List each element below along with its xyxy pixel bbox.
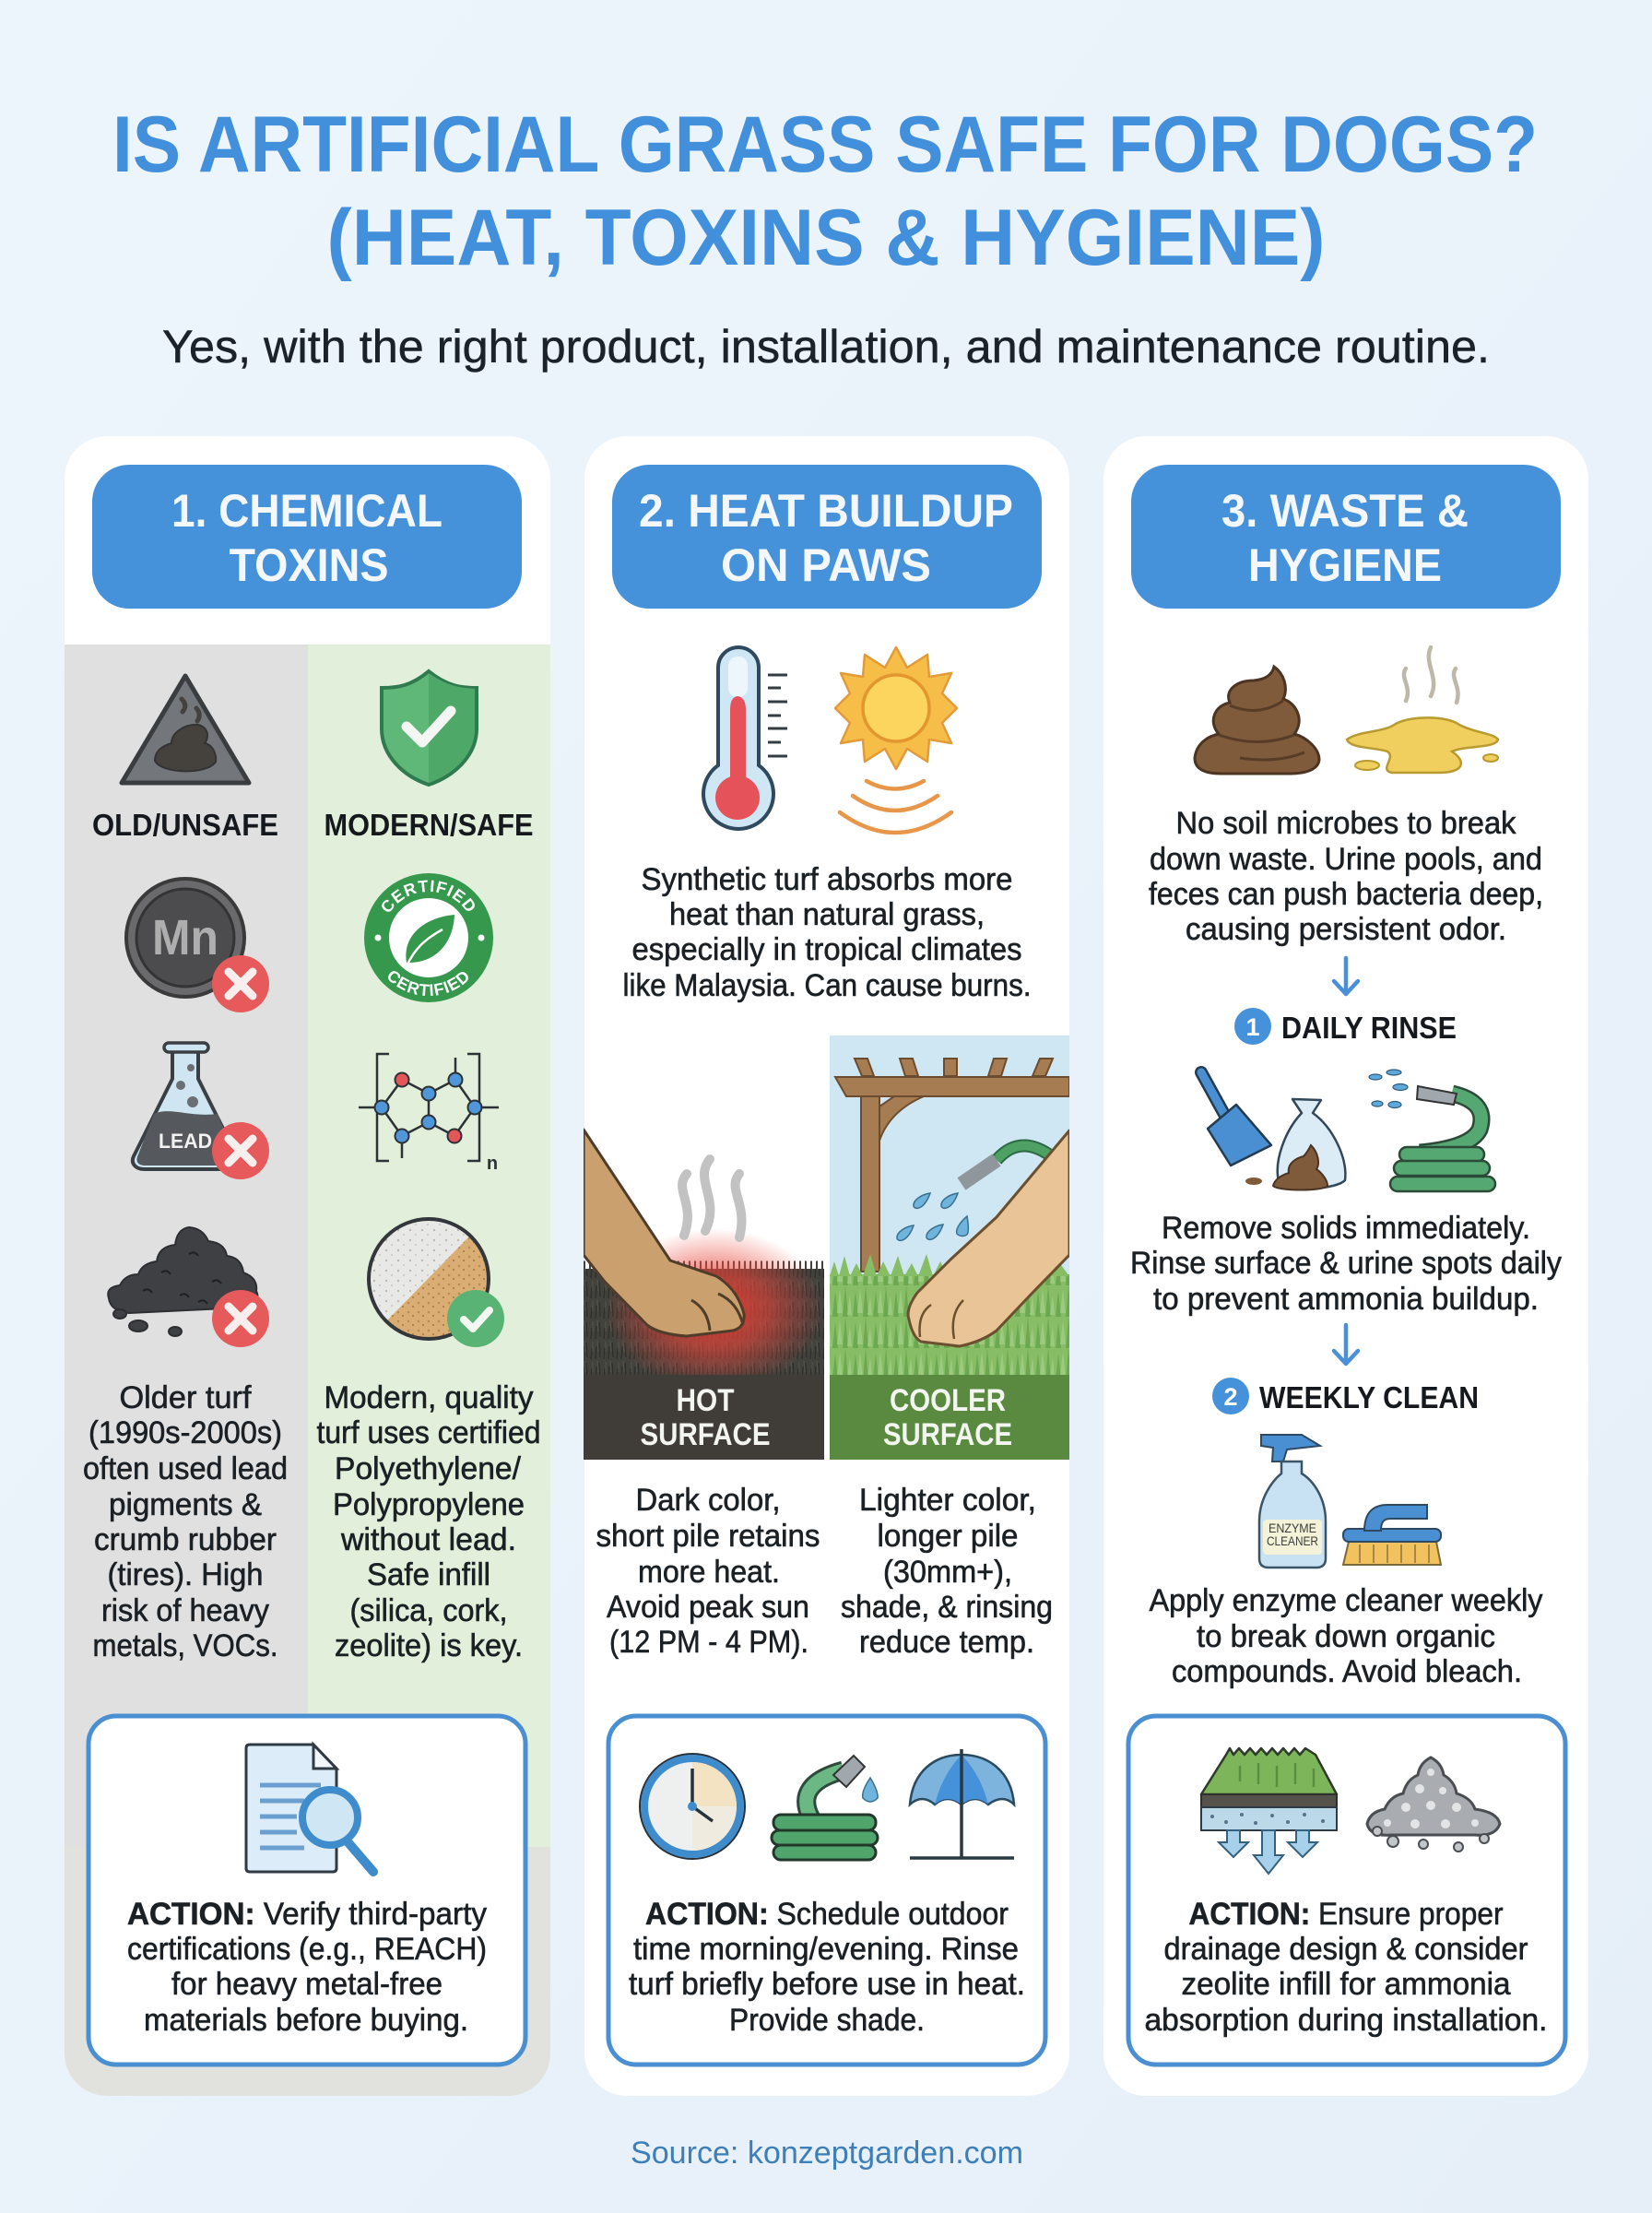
text: enzyme cleaner: to break down organic: [1197, 1619, 1495, 1654]
heading: weekly clean: WEEKLY CLEAN: [1259, 1380, 1479, 1414]
text: hygiene explanation: down waste. Urine pools, and: [1150, 842, 1542, 877]
text: old turf: [83, 1380, 288, 1663]
text: old turf: risk of heavy: [101, 1593, 269, 1628]
text: action 2: ACTION: Schedule outdoor: [645, 1897, 1009, 1932]
label: cooler surface: COOLER: [890, 1383, 1006, 1418]
icon: manganese disc: Mn: [152, 910, 218, 965]
text: dark color: Avoid peak sun: [607, 1590, 809, 1625]
text: old turf: pigments &: [109, 1487, 262, 1522]
icon: red cross badge: [212, 955, 269, 1012]
text: lighter color: (30mm+),: [883, 1555, 1012, 1590]
heading: waste and hygiene: 3. WASTE &: [1221, 485, 1469, 537]
icon: lead flask: LEAD: [159, 1130, 212, 1153]
label: old/unsafe: OLD/UNSAFE: [92, 808, 278, 842]
text: hygiene explanation: No soil microbes to break: [1176, 806, 1516, 841]
illustration: hot surface paw: [584, 1130, 824, 1460]
text: hygiene explanation: [1149, 806, 1543, 947]
icon: scrub brush: [1343, 1505, 1441, 1565]
text: hygiene explanation: causing persistent odor.: [1186, 912, 1506, 947]
text: heat explanation: like Malaysia. Can cause burns.: [623, 968, 1031, 1003]
text: action 3: ACTION: Ensure proper: [1189, 1897, 1503, 1932]
text: old turf: often used lead: [83, 1451, 288, 1486]
text: action 2: turf briefly before use in heat.: [629, 1967, 1025, 2002]
label: cooler surface: SURFACE: [883, 1417, 1012, 1452]
text: old turf: crumb rubber: [94, 1522, 277, 1557]
icon: scoop and bag: [1201, 1072, 1345, 1189]
text: lighter color: Lighter color,: [859, 1483, 1036, 1518]
text: old turf: (tires). High: [107, 1557, 264, 1592]
text: enzyme cleaner: compounds. Avoid bleach.: [1172, 1654, 1522, 1689]
illustration: cooler surface paw: [830, 1035, 1069, 1460]
text: modern turf: Polypropylene: [333, 1487, 525, 1522]
icon: sun with heat waves: [835, 647, 957, 833]
icon: urine puddle: [1347, 647, 1498, 773]
text: enzyme cleaner: Apply enzyme cleaner weekly: [1149, 1583, 1543, 1618]
heading: chemical toxins: 1. CHEMICAL: [171, 485, 442, 537]
text: lighter color: shade, & rinsing: [841, 1590, 1053, 1625]
heading: chemical toxins: TOXINS: [229, 539, 389, 591]
text: old turf: Older turf: [120, 1380, 252, 1415]
text: action 3: drainage design & consider: [1163, 1932, 1528, 1967]
text: action 1: certifications (e.g., REACH): [127, 1932, 487, 1967]
icon: red cross badge: [212, 1122, 269, 1179]
icon: coiled hose: [772, 1756, 878, 1860]
heading: chemical toxins: [92, 465, 522, 609]
icon: enzyme cleaner spray: CLEANER: [1267, 1534, 1318, 1548]
icon: polymer molecule: [359, 1054, 499, 1174]
text: heat explanation: Synthetic turf absorbs more: [642, 862, 1012, 897]
text: action 2: [629, 1897, 1025, 2038]
text: modern turf: without lead.: [340, 1522, 516, 1557]
heading: weekly clean: 2: [1223, 1383, 1238, 1411]
icon: red cross badge: [212, 1290, 269, 1347]
text: lighter color: longer pile: [878, 1519, 1018, 1554]
icon: crumb rubber pile: [108, 1227, 258, 1336]
icon: green check badge: [447, 1290, 504, 1347]
icon: lead flask: [133, 1043, 238, 1169]
text: dark color: Dark color,: [636, 1483, 780, 1518]
text: dark color: [596, 1483, 820, 1660]
label: hot surface: HOT: [677, 1383, 735, 1418]
text: modern turf: Modern, quality: [324, 1380, 533, 1415]
heading: waste and hygiene: HYGIENE: [1248, 539, 1442, 591]
icon: thermometer: [703, 647, 787, 829]
text: lighter color: [841, 1483, 1053, 1660]
panel: waste and hygiene: [1103, 436, 1588, 2096]
text: heat explanation: [623, 862, 1031, 1003]
heading: heat buildup: ON PAWS: [721, 539, 931, 591]
text: remove solids: Remove solids immediately.: [1162, 1211, 1530, 1246]
icon: certified seal: [364, 873, 493, 1002]
heading: daily rinse: DAILY RINSE: [1281, 1011, 1457, 1045]
icon: enzyme cleaner spray: [1259, 1435, 1326, 1568]
text: modern turf: [317, 1380, 540, 1663]
text: action 3: [1145, 1897, 1547, 2038]
text: action 2: Provide shade.: [729, 2003, 925, 2038]
text: heat explanation: especially in tropical climates: [632, 932, 1021, 967]
icon: manganese disc: [126, 879, 244, 997]
icon: dog waste: [1195, 667, 1319, 774]
icon: certified seal: CERTIFIED: [388, 971, 468, 996]
icon: hose spraying: [1369, 1070, 1495, 1191]
heading: heat buildup: 2. HEAT BUILDUP: [639, 485, 1013, 537]
icon: green safety shield: [382, 671, 477, 785]
text: remove solids: to prevent ammonia buildup.: [1153, 1282, 1539, 1317]
heading: daily rinse: [1234, 1008, 1457, 1045]
icon: zeolite gravel: [1367, 1757, 1500, 1852]
arrow: to daily rinse: [1334, 958, 1358, 994]
callout: action schedule: [608, 1716, 1045, 2065]
panel: heat buildup: [584, 436, 1069, 2096]
arrow: to weekly clean: [1334, 1325, 1358, 1364]
text: modern turf: Polyethylene/: [335, 1451, 522, 1486]
icon: safe infill circle: [369, 1219, 489, 1339]
text: heat explanation: heat than natural grass,: [669, 897, 985, 932]
panel: chemical toxins: [65, 436, 550, 2096]
text: action 1: for heavy metal-free: [171, 1967, 442, 2002]
title: (HEAT, TOXINS & HYGIENE): [326, 194, 1326, 282]
heading: daily rinse: 1: [1245, 1013, 1260, 1041]
icon: clock: [640, 1754, 745, 1859]
icon: umbrella: [910, 1749, 1014, 1858]
callout: action certifications: [88, 1716, 525, 2065]
icon: enzyme cleaner spray: ENZYME: [1268, 1521, 1316, 1535]
text: action 3: zeolite infill for ammonia: [1182, 1967, 1511, 2002]
text: remove solids: Rinse surface & urine spots daily: [1130, 1246, 1562, 1281]
text: dark color: short pile retains: [596, 1519, 820, 1554]
text: hygiene explanation: feces can push bacteria deep,: [1149, 877, 1543, 912]
callout: action drainage: [1128, 1716, 1565, 2065]
text: old turf: (1990s-2000s): [88, 1415, 282, 1450]
icon: certified seal: CERTIFIED: [382, 880, 475, 912]
text: dark color: (12 PM - 4 PM).: [609, 1625, 808, 1660]
heading: heat buildup: [612, 465, 1042, 609]
text: modern turf: Safe infill: [367, 1557, 490, 1592]
text: action 1: materials before buying.: [144, 2003, 468, 2038]
text: modern turf: (silica, cork,: [350, 1593, 507, 1628]
text: remove solids: [1130, 1211, 1562, 1317]
icon: polymer molecule: n: [487, 1154, 498, 1174]
text: action 1: ACTION: Verify third-party: [127, 1897, 487, 1932]
text: dark color: more heat.: [638, 1555, 780, 1590]
title: [112, 101, 1538, 282]
title: IS ARTIFICIAL GRASS SAFE FOR DOGS?: [112, 101, 1538, 189]
source credit: Source: konzeptgarden.com: [631, 2136, 1023, 2171]
icon: document with magnifier: [246, 1745, 373, 1872]
text: action 1: [127, 1897, 487, 2038]
label: hot surface: [640, 1383, 771, 1452]
text: lighter color: reduce temp.: [859, 1625, 1034, 1660]
label: cooler surface: [883, 1383, 1012, 1452]
subtitle: Yes, with the right product, installation, and maintenance routine.: [162, 321, 1490, 373]
label: modern/safe: MODERN/SAFE: [324, 808, 533, 842]
label: hot surface: SURFACE: [640, 1417, 771, 1452]
text: action 3: absorption during installation.: [1145, 2003, 1547, 2038]
text: modern turf: turf uses certified: [317, 1415, 540, 1450]
text: modern turf: zeolite) is key.: [335, 1628, 523, 1663]
icon: turf drainage cross-section: [1201, 1748, 1337, 1874]
text: old turf: metals, VOCs.: [92, 1628, 278, 1663]
icon: warning triangle with waste: [122, 676, 249, 783]
text: action 2: time morning/evening. Rinse: [633, 1932, 1019, 1967]
text: enzyme cleaner: [1149, 1583, 1543, 1689]
heading: waste and hygiene: [1131, 465, 1561, 609]
